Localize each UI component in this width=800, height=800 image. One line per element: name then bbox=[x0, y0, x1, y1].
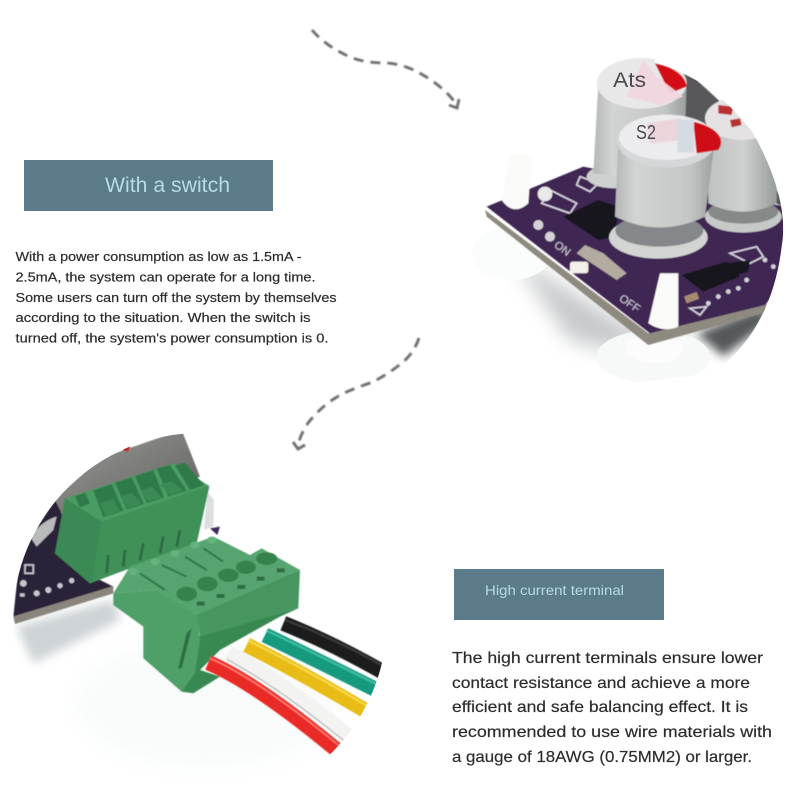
pale backdrop bbox=[73, 637, 340, 770]
wire: green bbox=[265, 635, 387, 695]
text block: switch description: 2.5mA, the system can operate for a long time. bbox=[16, 270, 316, 284]
lower connector plug bbox=[113, 590, 200, 692]
arrow: dashed curve to top photo bbox=[312, 30, 459, 108]
label: Ats: Ats bbox=[613, 69, 646, 92]
text block: switch description: turned off, the system's power consumption is 0. bbox=[16, 332, 328, 346]
capacitor: back right bbox=[704, 209, 782, 234]
panel: With a switch header bbox=[24, 160, 273, 211]
photo: green terminal connector with wires bbox=[13, 430, 390, 770]
terminal screw holes bbox=[176, 552, 277, 601]
photo: circuit board with capacitors and switch: OFF bbox=[617, 293, 642, 315]
wire: white bbox=[228, 653, 358, 744]
text block: terminal description: contact resistance and achieve a more bbox=[452, 675, 750, 692]
board top face bbox=[487, 167, 785, 333]
heading: With a switch: With a switch bbox=[105, 174, 230, 197]
text block: terminal description: efficient and safe balancing effect. It is bbox=[452, 699, 748, 716]
capacitor remnant bbox=[55, 434, 200, 514]
photo: circuit board with capacitors and switch bbox=[484, 58, 784, 362]
upper connector bbox=[54, 486, 210, 584]
copper traces and silk bbox=[542, 177, 763, 315]
heading: High current terminal: High current terminal bbox=[485, 582, 624, 598]
wire: red bbox=[208, 663, 347, 758]
shadow under board bbox=[17, 600, 120, 663]
panel: High current terminal header bbox=[454, 569, 664, 620]
text block: terminal description: The high current terminals ensure lower bbox=[452, 650, 764, 667]
connector teeth bbox=[107, 530, 180, 573]
silk labels: ON bbox=[552, 239, 572, 259]
capacitor: front bbox=[608, 224, 708, 260]
text block: switch description: according to the situation. When the switch is bbox=[16, 311, 310, 325]
text block: switch description bbox=[16, 250, 337, 346]
text block: terminal description: recommended to use wire materials with bbox=[452, 724, 772, 741]
terminal ridges bbox=[140, 548, 223, 590]
lower connector top bbox=[113, 537, 300, 617]
white standoff bases bbox=[516, 259, 546, 279]
arrow: dashed curve to bottom photo bbox=[293, 338, 419, 449]
wire: yellow bbox=[247, 645, 377, 717]
gray back shade bbox=[655, 60, 783, 207]
wire: black bbox=[283, 623, 390, 676]
nylon standoffs bbox=[501, 188, 530, 210]
label: S2: S2 bbox=[636, 122, 656, 144]
text block: terminal description: a gauge of 18AWG (0.75MM2) or larger. bbox=[452, 749, 752, 766]
switch bbox=[577, 245, 627, 280]
board edge bbox=[485, 210, 767, 345]
lower connector front bbox=[197, 570, 300, 637]
chips bbox=[563, 200, 618, 240]
capacitor: back left bbox=[586, 168, 618, 190]
text block: terminal description bbox=[452, 650, 772, 766]
board bbox=[13, 500, 113, 617]
text block: switch description: With a power consumption as low as 1.5mA - bbox=[16, 250, 302, 264]
connector slots bbox=[75, 463, 204, 517]
connector floor bbox=[182, 608, 298, 693]
text block: switch description: Some users can turn off the system by themselves bbox=[16, 291, 337, 305]
shadow under board bbox=[518, 266, 703, 357]
